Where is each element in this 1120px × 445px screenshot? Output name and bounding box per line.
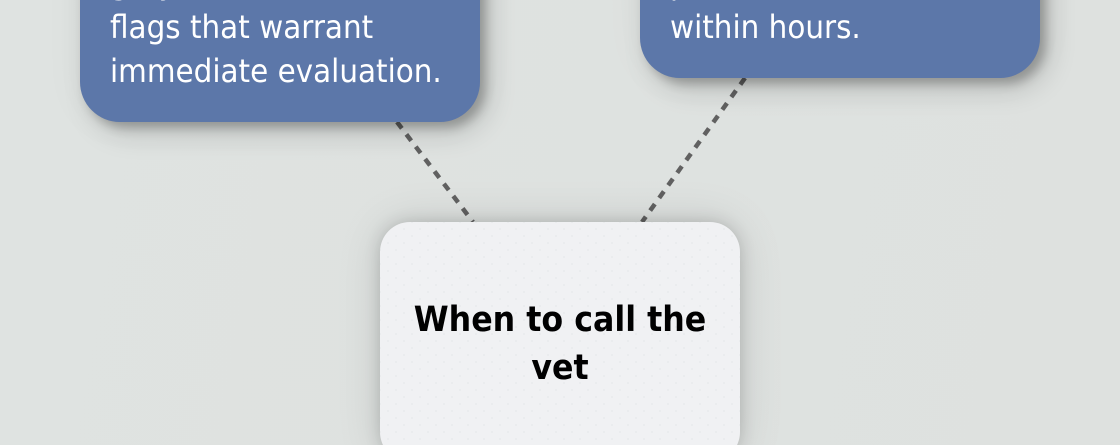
panel: left blue callout	[80, 0, 480, 122]
heading: when to call the vet	[414, 300, 706, 388]
heading: when to call the vet: When to call the	[414, 300, 706, 340]
heading: when to call the vet: vet	[531, 348, 589, 388]
text: left callout body	[110, 0, 442, 90]
text: right callout body: within hours.	[670, 8, 861, 46]
text: left callout body: immediate evaluation.	[110, 52, 442, 90]
text: left callout body: flags that warrant	[110, 8, 373, 46]
panel: right blue callout	[640, 0, 1040, 78]
panel: central card	[380, 222, 740, 445]
